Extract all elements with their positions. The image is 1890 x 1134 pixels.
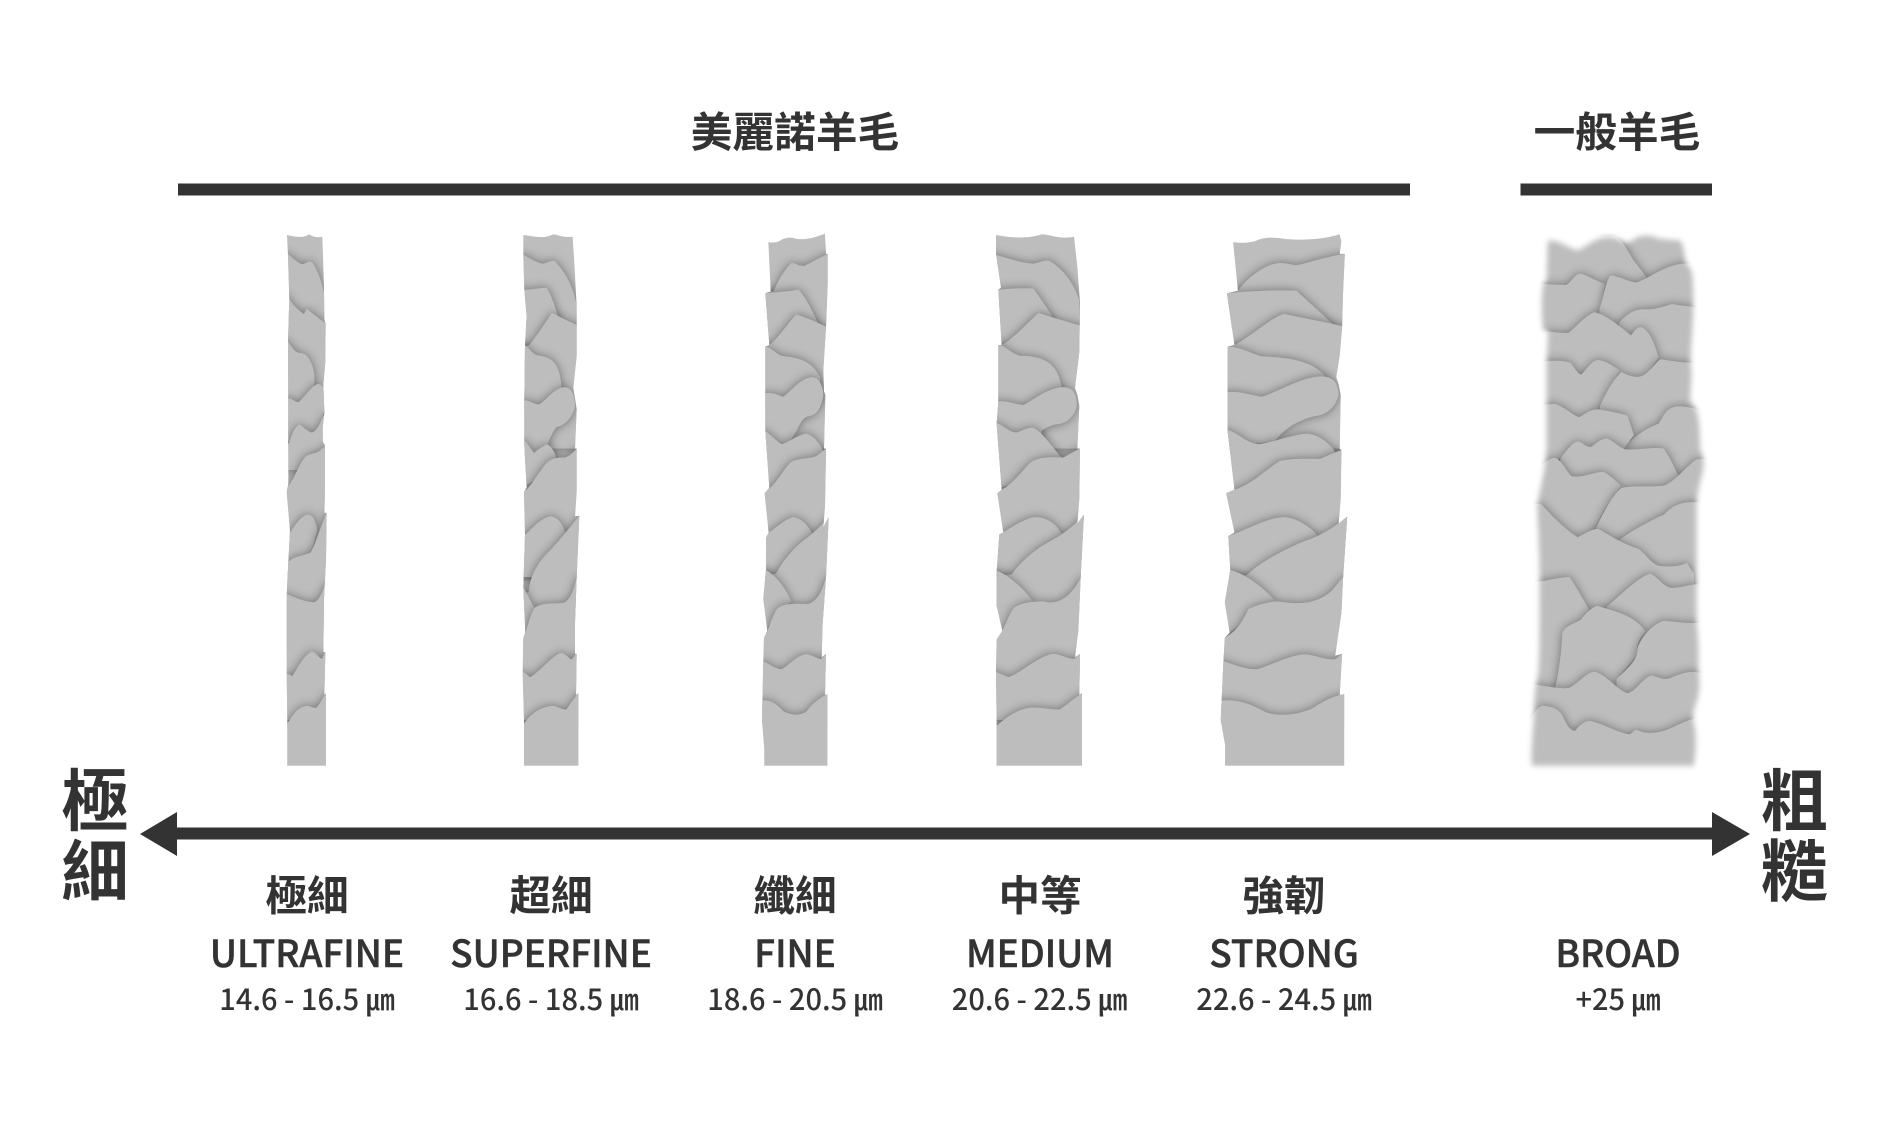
label: superfine: SUPERFINE <box>450 924 652 978</box>
fibre: strong <box>1220 234 1348 766</box>
fibre: medium <box>996 234 1084 766</box>
label: strong: STRONG <box>1209 924 1359 978</box>
heading: merino wool: 美麗諾羊毛 <box>691 100 899 160</box>
fibre: broad <box>1528 232 1706 769</box>
axis label: coarse: 糙 <box>1761 818 1828 916</box>
fibre: fine <box>762 234 829 766</box>
double-headed arrow <box>140 812 1750 856</box>
label: superfine: 16.6 - 18.5 ㎛ <box>463 977 639 1019</box>
heading: common wool <box>1520 100 1712 196</box>
label: ultrafine: 14.6 - 16.5 ㎛ <box>219 977 395 1019</box>
label: fine <box>707 862 883 1019</box>
heading: common wool: 一般羊毛 <box>1534 100 1700 160</box>
axis label: fine <box>62 748 128 916</box>
label: broad: +25 ㎛ <box>1575 977 1661 1019</box>
label: fine: FINE <box>754 924 836 978</box>
label: medium: MEDIUM <box>966 924 1114 978</box>
label: broad: BROAD <box>1555 924 1681 978</box>
label: ultrafine: ULTRAFINE <box>210 924 404 978</box>
label: strong <box>1196 862 1372 1019</box>
label: superfine <box>450 862 652 1019</box>
label: medium: 20.6 - 22.5 ㎛ <box>952 977 1127 1019</box>
label: broad <box>1555 924 1681 1019</box>
axis label: coarse <box>1761 748 1828 916</box>
axis label: fine: 細 <box>62 818 128 916</box>
axis label: coarse: 粗 <box>1761 748 1828 845</box>
label: medium <box>952 862 1127 1019</box>
label: fine: 纖細 <box>753 862 837 922</box>
axis label: fine: 極 <box>62 748 128 845</box>
label: ultrafine <box>210 862 404 1019</box>
label: superfine: 超細 <box>509 862 593 922</box>
label: strong: 強韌 <box>1242 862 1326 922</box>
label: medium: 中等 <box>998 862 1082 922</box>
fibre: superfine <box>522 234 580 766</box>
label: strong: 22.6 - 24.5 ㎛ <box>1196 977 1372 1019</box>
heading: merino wool <box>178 100 1410 196</box>
label: fine: 18.6 - 20.5 ㎛ <box>707 977 883 1019</box>
label: ultrafine: 極細 <box>265 862 349 922</box>
fibre: ultrafine <box>286 234 327 766</box>
